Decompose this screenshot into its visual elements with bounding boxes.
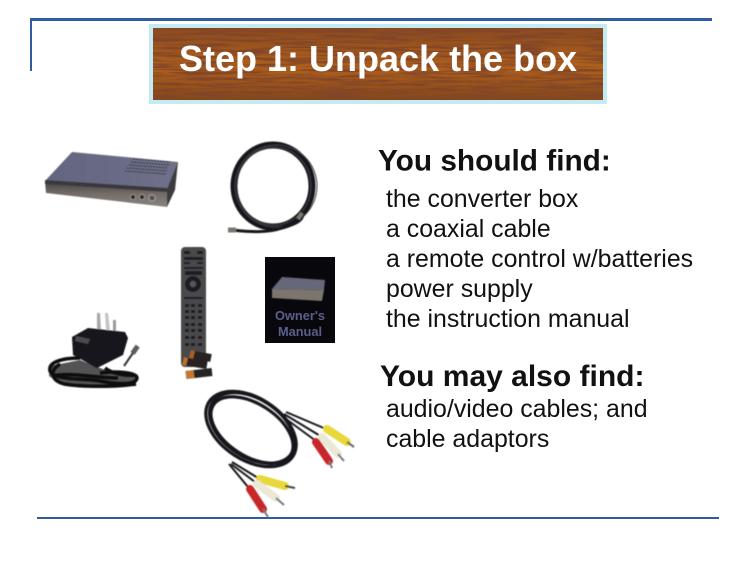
icon: owner's manual: Manual [278,324,322,339]
list: items in the box: power supply [386,275,533,303]
list: optional items [386,395,648,453]
heading: you should find: You should find: [378,144,611,178]
list: items in the box: a remote control w/batteries [386,245,693,273]
list: items in the box: the converter box [386,185,579,213]
title: Step 1: Unpack the box [179,38,577,79]
plugs lower end [260,479,285,486]
icon: converter box [45,152,178,207]
heading: you may also find: You may also find: [380,360,644,393]
icon: power supply [49,313,140,386]
icon: remote control with batteries [181,247,212,375]
icon: coaxial cable [228,145,317,232]
list: items in the box [386,185,693,333]
plugs upper end [327,429,347,442]
bottom rule [37,517,719,519]
list: optional items: audio/video cables; and [386,395,648,423]
list: optional items: cable adaptors [386,425,549,453]
icon: batteries [183,354,212,375]
list: items in the box: the instruction manual [386,305,630,333]
icon: owner's manual [265,257,335,343]
title banner [149,24,607,104]
icon: audio/video cables [192,376,354,517]
list: items in the box: a coaxial cable [386,215,551,243]
icon: owner's manual: Owner's [275,308,325,323]
top and left frame rule [30,18,712,71]
